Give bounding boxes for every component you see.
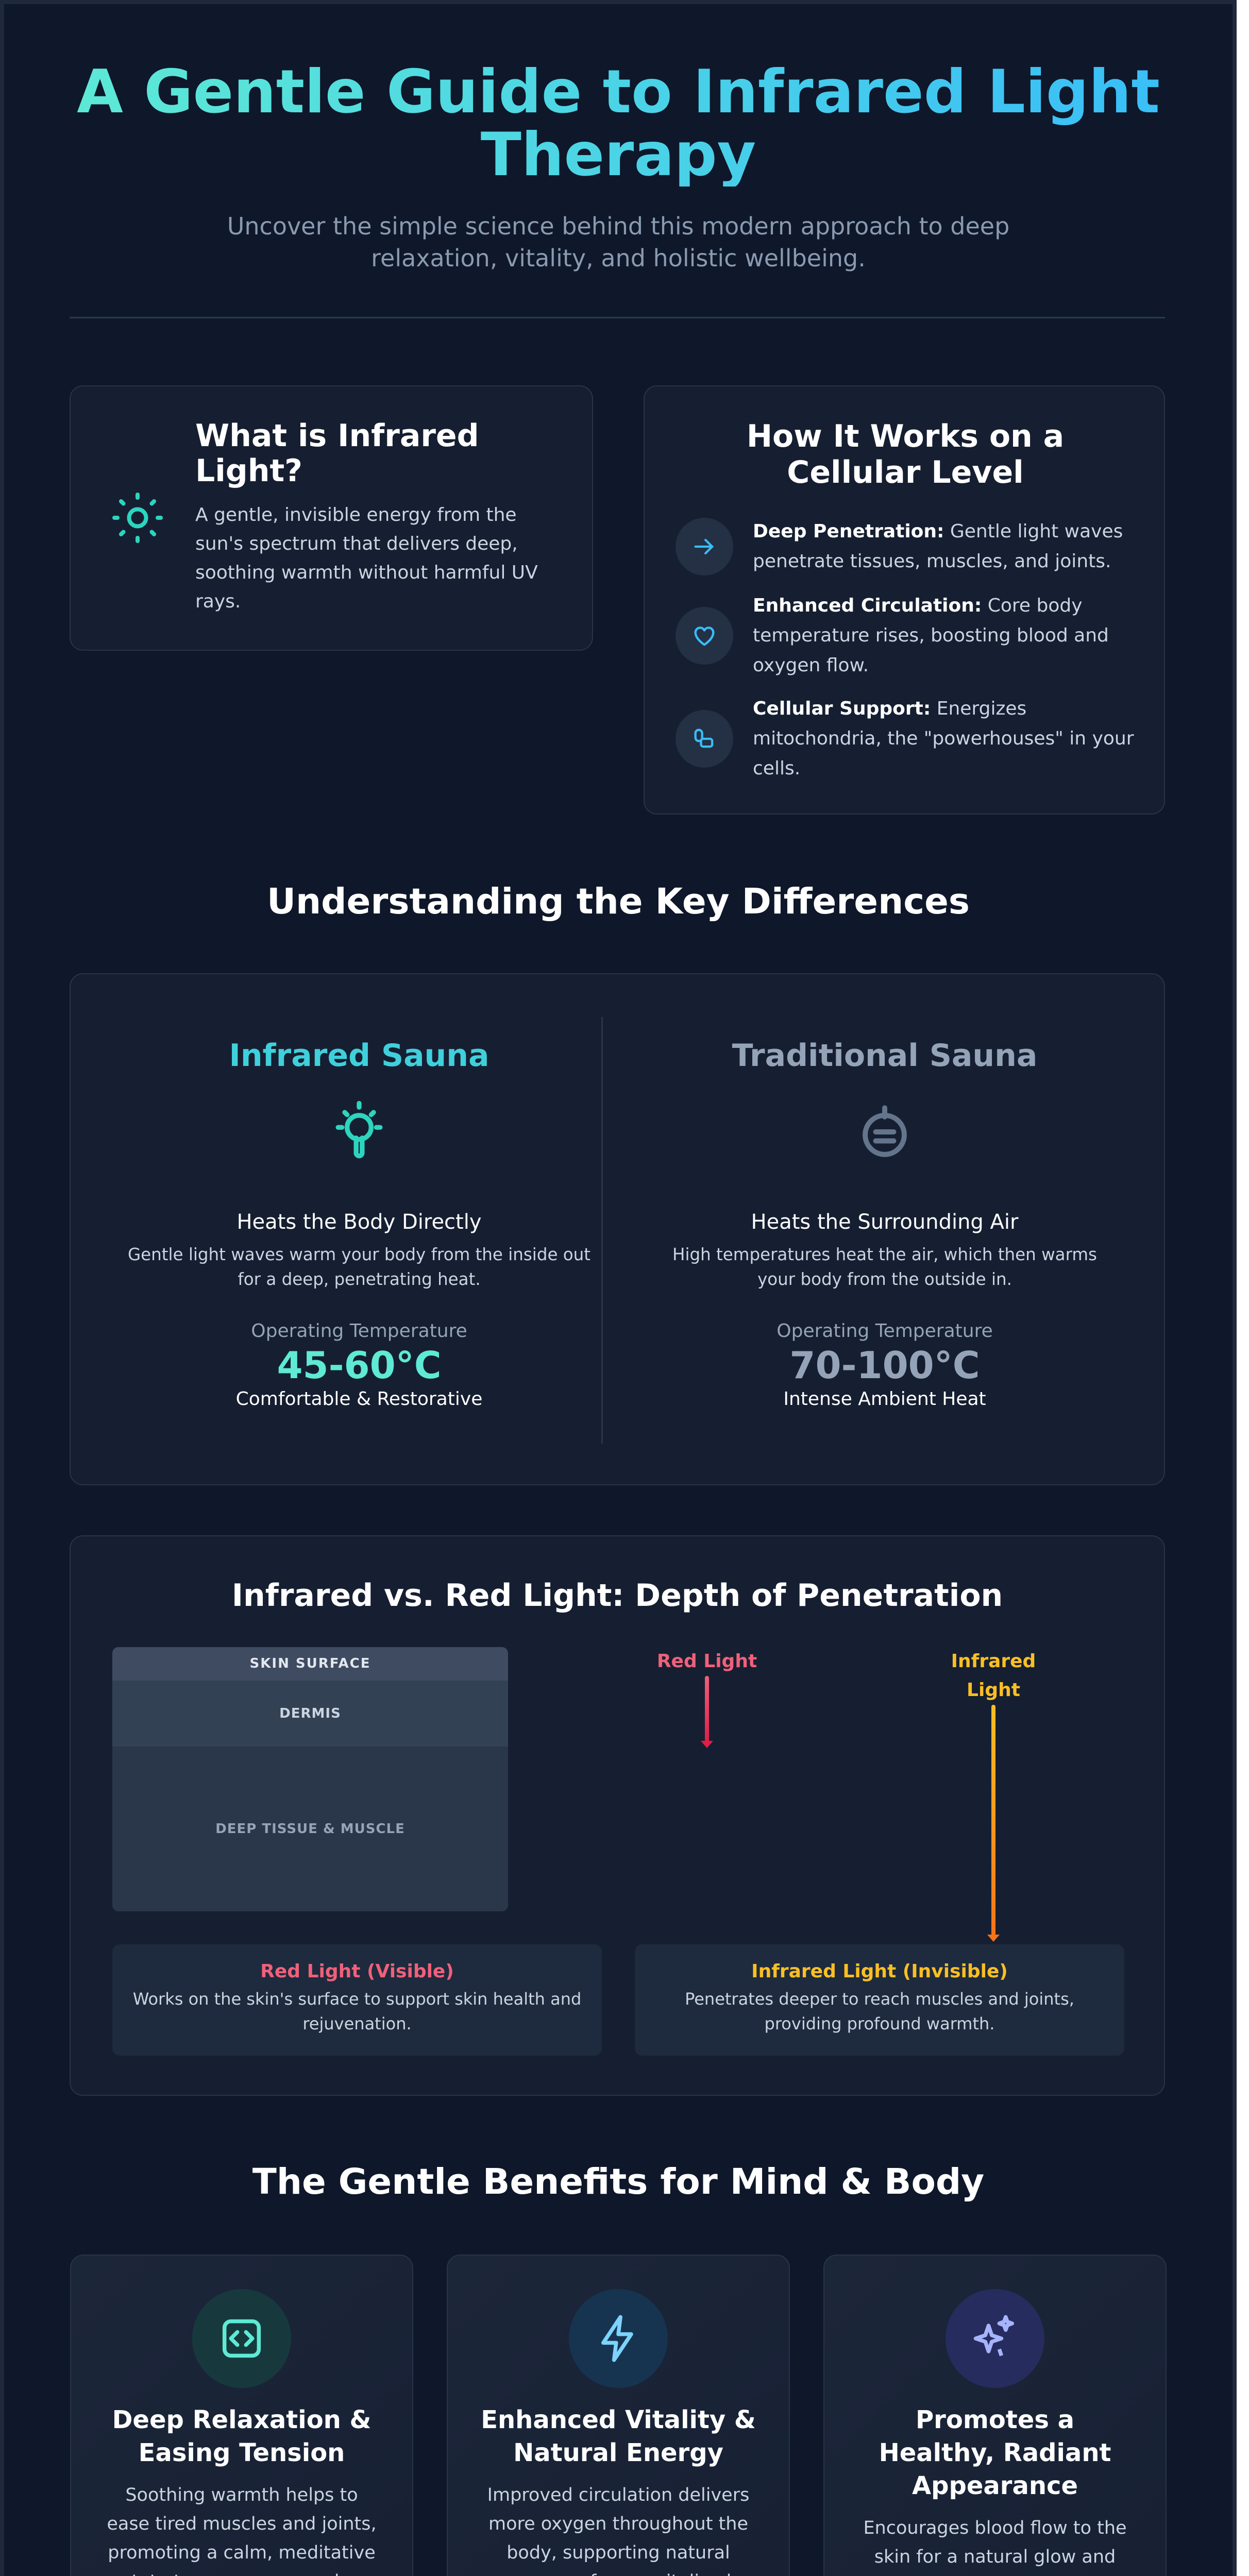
- column: infrared sauna: Gentle light waves warm your body from the inside out for a deep, penetrating heat.: [128, 1245, 590, 1289]
- title: A Gentle Guide to Infrared Light Therapy: [77, 57, 1160, 190]
- icon: bolt: [569, 2289, 668, 2388]
- card: radiant: [823, 2255, 1167, 2576]
- column: traditional sauna: High temperatures heat the air, which then warms your body from the outside in.: [672, 1245, 1097, 1289]
- arrow: red light: Red Light: [657, 1651, 757, 1672]
- heading: Cellular Level: [787, 454, 1024, 490]
- icon: sun: [112, 493, 163, 543]
- box: infrared light: Penetrates deeper to reach muscles and joints, providing profound warmth.: [685, 1989, 1074, 2033]
- card: vitality: Enhanced Vitality &: [481, 2405, 756, 2434]
- heading: Infrared vs. Red Light: Depth of Penetration: [232, 1578, 1003, 1614]
- box: red light: [112, 1944, 602, 2056]
- card: radiant: Appearance: [912, 2471, 1078, 2500]
- skin diagram: SKIN SURFACE: [250, 1656, 370, 1671]
- heading: How It Works on a: [747, 418, 1064, 454]
- column: infrared sauna: Infrared Sauna: [229, 1038, 489, 1074]
- card: radiant: Promotes a: [916, 2405, 1074, 2434]
- column: infrared sauna: Operating Temperature: [251, 1320, 467, 1342]
- column: infrared sauna: 45-60°C: [277, 1344, 442, 1387]
- arrow: infrared light: Infrared: [951, 1651, 1036, 1672]
- column: traditional sauna: 70-100°C: [789, 1344, 980, 1387]
- heading: key differences: Understanding the Key Differences: [267, 881, 970, 922]
- card: relaxation: [70, 2255, 413, 2576]
- arrow: infrared light: [951, 1651, 1036, 1942]
- skin diagram: DEEP TISSUE & MUSCLE: [215, 1821, 405, 1837]
- panel: how it works: [644, 385, 1165, 815]
- card: radiant: Healthy, Radiant: [879, 2438, 1111, 2467]
- skin diagram: [112, 1647, 508, 1911]
- arrow: infrared light: Light: [967, 1680, 1020, 1701]
- heading: benefits: The Gentle Benefits for Mind & Body: [252, 2161, 984, 2202]
- column: traditional sauna: Intense Ambient Heat: [783, 1388, 986, 1410]
- panel: what is infrared: [70, 385, 593, 651]
- column: infrared sauna: Comfortable & Restorative: [236, 1388, 482, 1410]
- column: infrared sauna: [128, 1038, 590, 1410]
- column: infrared sauna: Heats the Body Directly: [237, 1210, 482, 1234]
- box: infrared light: Infrared Light (Invisible): [751, 1961, 1008, 1982]
- item: deep penetration: Deep Penetration: Gentle light waves penetrate tissues, muscles, and joints.: [753, 521, 1123, 572]
- icon: stove: [863, 1105, 907, 1157]
- card: vitality: Natural Energy: [513, 2438, 723, 2467]
- column: traditional sauna: Heats the Surrounding Air: [751, 1210, 1018, 1234]
- column: traditional sauna: Operating Temperature: [777, 1320, 993, 1342]
- box: red light: Red Light (Visible): [260, 1961, 454, 1982]
- heading: What is Infrared Light?: [195, 418, 479, 489]
- skin diagram: DERMIS: [279, 1706, 341, 1721]
- icon: bulb: [336, 1100, 382, 1158]
- panel: penetration depth: [70, 1535, 1165, 2096]
- arrow: red light: [657, 1651, 757, 1748]
- column: traditional sauna: Traditional Sauna: [732, 1038, 1037, 1074]
- item: cellular support: Cellular Support: Energizes mitochondria, the "powerhouses" in your cells.: [753, 698, 1134, 779]
- heading: [747, 418, 1064, 490]
- item: circulation: Enhanced Circulation: Core body temperature rises, boosting blood and oxygen flow.: [753, 595, 1109, 676]
- subtitle: Uncover the simple science behind this modern approach to deep relaxation, vitality, and holistic wellbeing.: [227, 212, 1009, 272]
- panel: sauna comparison: [70, 973, 1165, 1485]
- icon: sparkles: [946, 2289, 1044, 2388]
- box: red light: Works on the skin's surface to support skin health and rejuvenation.: [133, 1989, 581, 2033]
- column: traditional sauna: [672, 1038, 1097, 1410]
- icon: relax: [192, 2289, 291, 2388]
- card: vitality: [447, 2255, 790, 2576]
- box: infrared light: [635, 1944, 1124, 2056]
- card: relaxation: Easing Tension: [139, 2438, 345, 2467]
- text: A gentle, invisible energy from the sun's spectrum that delivers deep, soothing warmth without harmful UV rays.: [195, 504, 538, 612]
- card: relaxation: Deep Relaxation &: [112, 2405, 371, 2434]
